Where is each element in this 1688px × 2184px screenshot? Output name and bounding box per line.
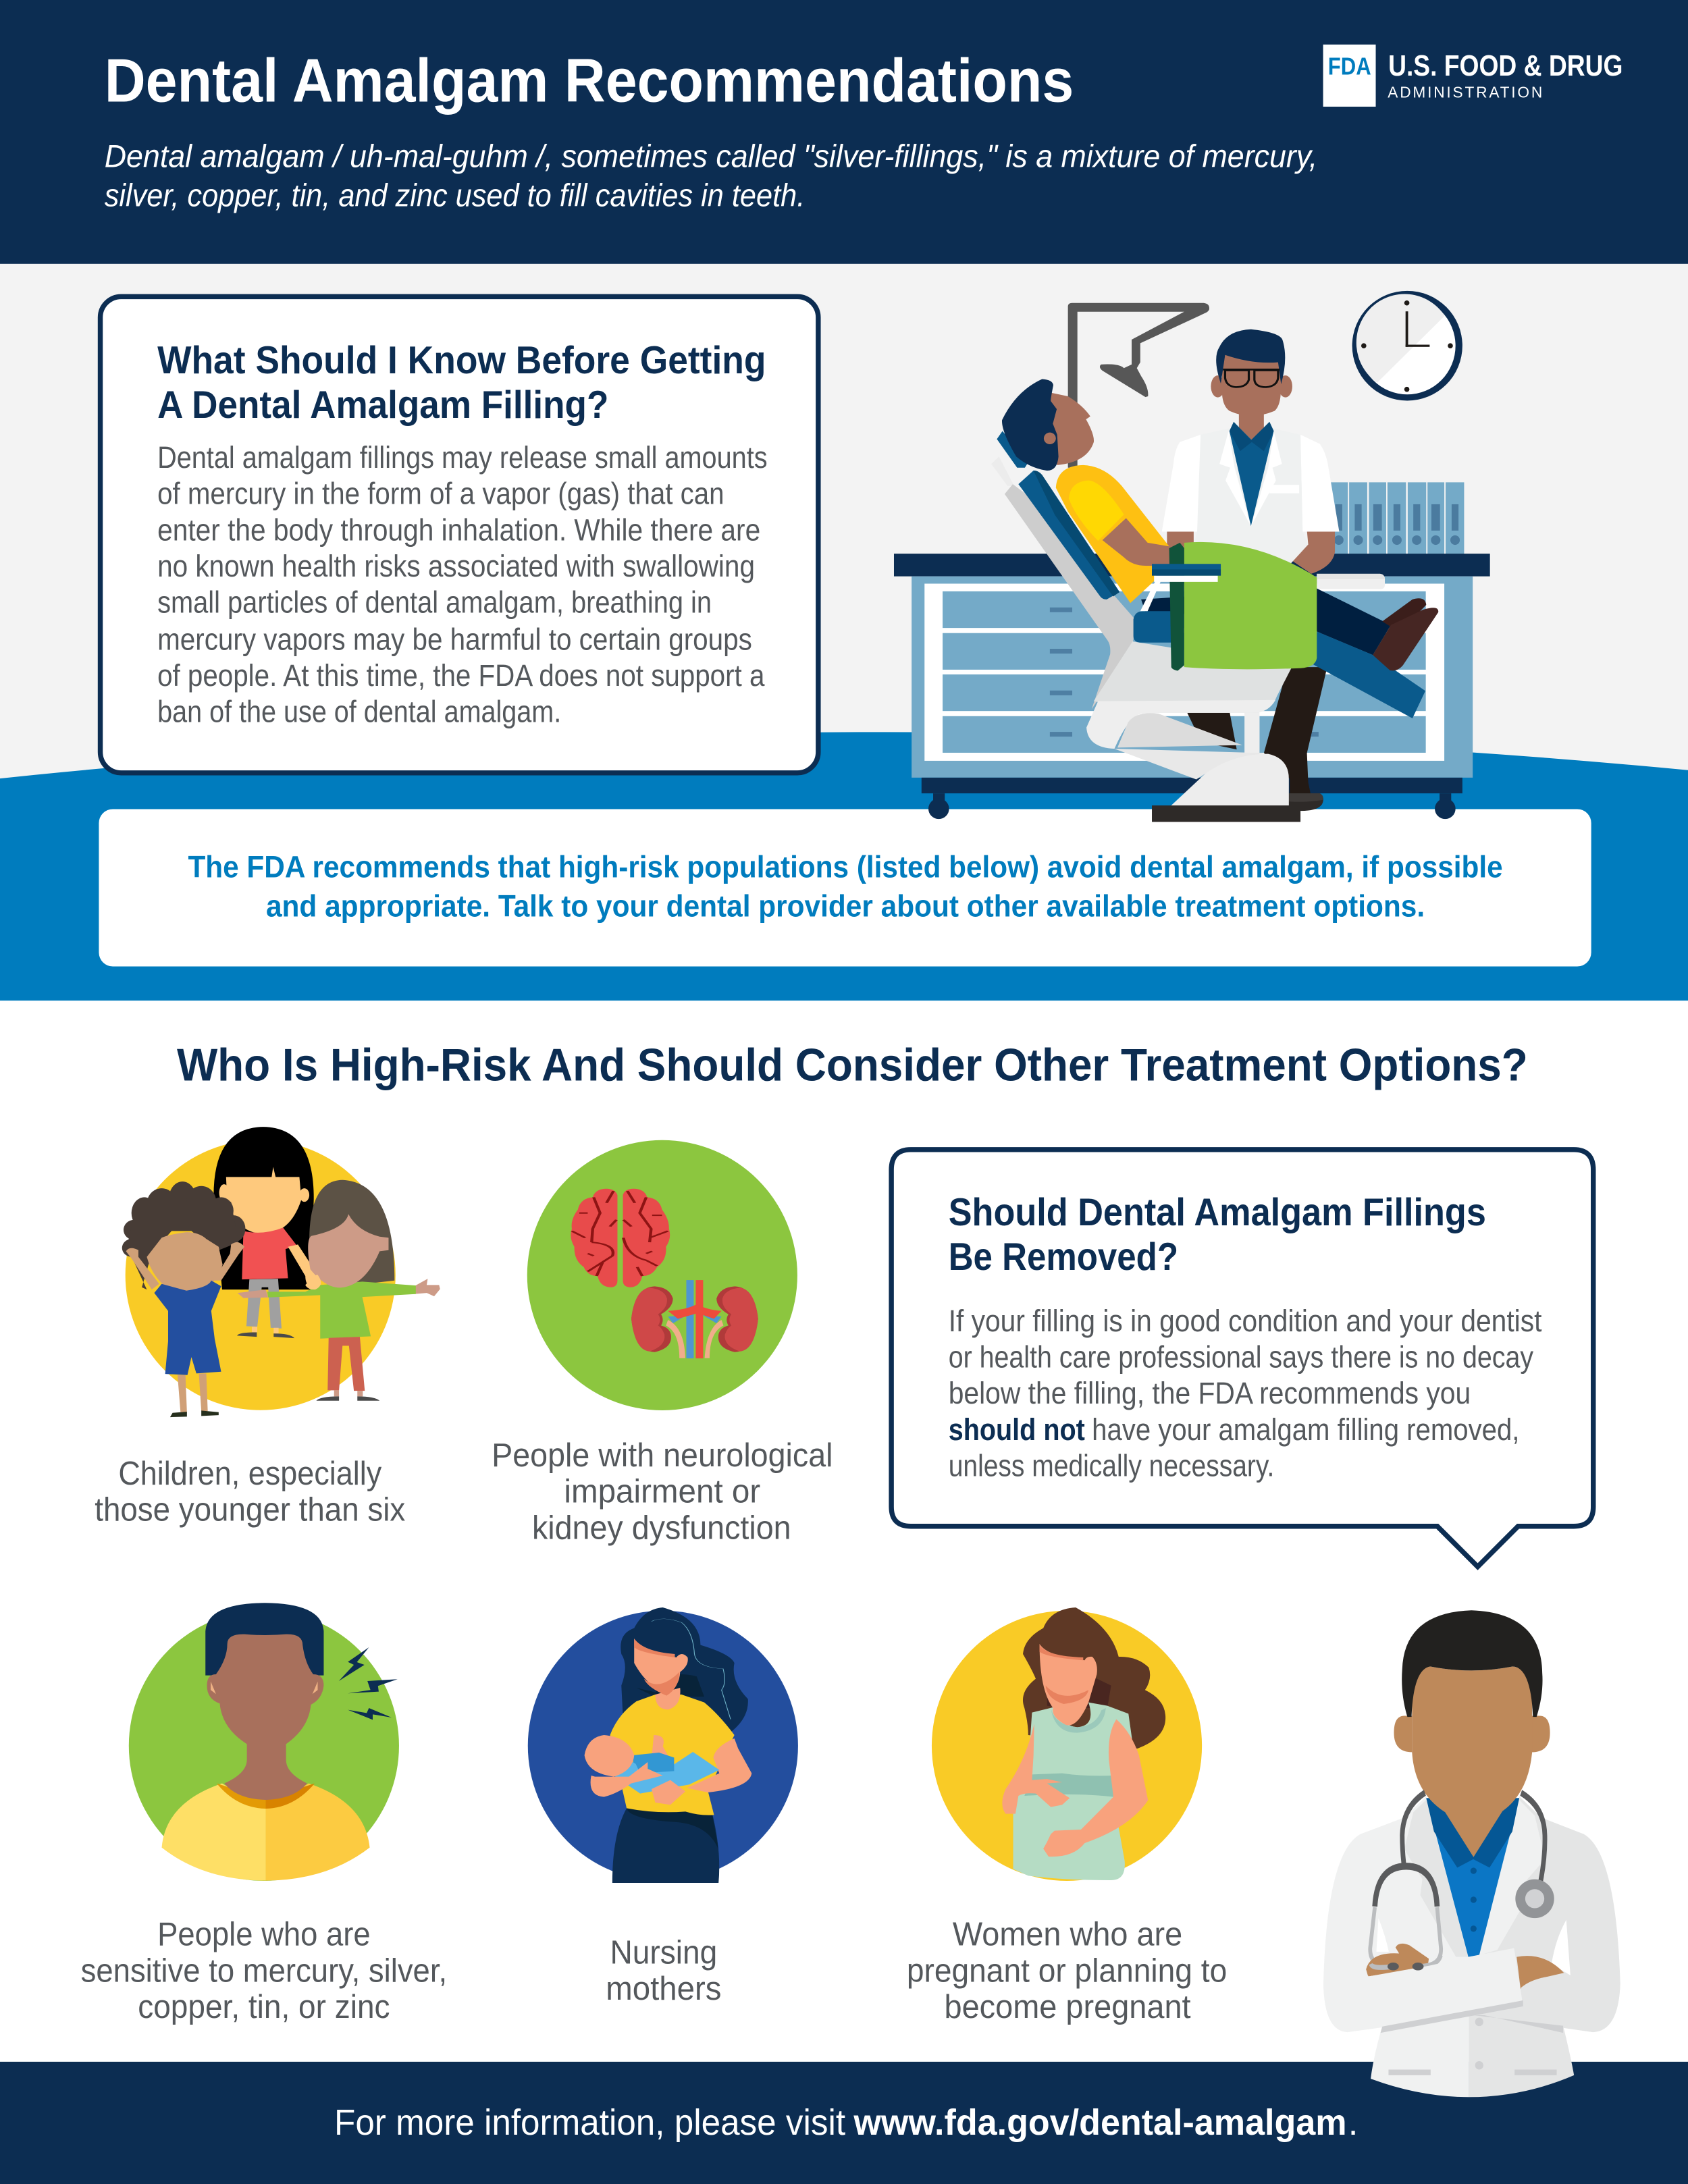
coat details bbox=[1388, 2018, 1557, 2075]
footer text: For more information, please visit bbox=[334, 2102, 845, 2143]
panel: what should I know bbox=[101, 296, 818, 773]
group: nursing mothers bbox=[528, 1607, 798, 2007]
subtitle bbox=[105, 139, 1317, 213]
footer text: . bbox=[1348, 2102, 1359, 2143]
label bbox=[492, 1437, 833, 1546]
panel body text: ban of the use of dental amalgam. bbox=[157, 695, 561, 729]
patient bbox=[1002, 379, 1438, 718]
section heading: Who Is High-Risk And Should Consider Other Treatment Options? bbox=[177, 1040, 1528, 1091]
label: kidney dysfunction bbox=[532, 1509, 791, 1546]
callout body text bbox=[949, 1304, 1542, 1483]
label bbox=[606, 1934, 721, 2007]
recommendation banner: The FDA recommends that high-risk populations (listed below) avoid dental amalgam, if possible bbox=[188, 850, 1503, 884]
group: pregnant women bbox=[907, 1607, 1227, 2025]
dental chair bbox=[991, 431, 1385, 822]
icon: brain and kidneys bbox=[527, 1140, 797, 1410]
callout body text: unless medically necessary. bbox=[949, 1449, 1274, 1483]
callout body text: below the filling, the FDA recommends you bbox=[949, 1376, 1471, 1410]
label: copper, tin, or zinc bbox=[138, 1988, 390, 2025]
brain bbox=[571, 1189, 670, 1287]
panel heading bbox=[157, 339, 766, 427]
FDA logo bbox=[1323, 45, 1623, 107]
recommendation banner bbox=[99, 809, 1591, 967]
arms bbox=[1376, 1918, 1571, 1975]
head bbox=[1394, 1716, 1550, 1752]
label: mothers bbox=[606, 1970, 721, 2007]
FDA logo: FDA bbox=[1328, 52, 1371, 80]
label bbox=[907, 1916, 1227, 2025]
panel heading: What Should I Know Before Getting bbox=[157, 339, 766, 382]
label: those younger than six bbox=[95, 1491, 405, 1528]
panel body text bbox=[157, 440, 768, 729]
recommendation banner: and appropriate. Talk to your dental provider about other available treatment options. bbox=[266, 888, 1425, 923]
binders bbox=[1331, 482, 1464, 554]
group: sensitive people bbox=[81, 1603, 447, 2025]
callout heading: Should Dental Amalgam Fillings bbox=[949, 1191, 1486, 1234]
callout heading bbox=[949, 1191, 1486, 1279]
subtitle: Dental amalgam / uh-mal-guhm /, sometimes called "silver-fillings," is a mixture of mercury, bbox=[105, 139, 1317, 175]
icon: children bbox=[122, 1127, 440, 1417]
group: neurological and kidney bbox=[492, 1140, 833, 1546]
panel body text: enter the body through inhalation. While there are bbox=[157, 512, 760, 547]
label: pregnant or planning to bbox=[907, 1952, 1227, 1989]
footer band bbox=[0, 2062, 1688, 2184]
panel body text: mercury vapors may be harmful to certain groups bbox=[157, 622, 752, 656]
panel heading: A Dental Amalgam Filling? bbox=[157, 383, 608, 427]
icon: nursing mother bbox=[528, 1607, 798, 1883]
callout body text: or health care professional says there is no decay bbox=[949, 1340, 1533, 1375]
panel body text: no known health risks associated with swallowing bbox=[157, 549, 755, 583]
label: sensitive to mercury, silver, bbox=[81, 1952, 447, 1989]
label: Nursing bbox=[610, 1934, 717, 1971]
label: People with neurological bbox=[492, 1437, 833, 1474]
label bbox=[81, 1916, 447, 2025]
FDA logo: ADMINISTRATION bbox=[1388, 83, 1542, 101]
header band bbox=[0, 0, 1688, 264]
footer text: www.fda.gov/dental-amalgam bbox=[853, 2102, 1347, 2143]
kidneys bbox=[631, 1286, 673, 1352]
panel body text: of mercury in the form of a vapor (gas) that can bbox=[157, 477, 724, 511]
dentist bbox=[1162, 329, 1339, 811]
icon: pregnant woman bbox=[932, 1607, 1202, 1881]
label: impairment or bbox=[564, 1473, 760, 1510]
label: People who are bbox=[157, 1916, 371, 1953]
label bbox=[95, 1455, 405, 1528]
label: Women who are bbox=[953, 1916, 1182, 1953]
shirt bbox=[1426, 1798, 1519, 1957]
subtitle: silver, copper, tin, and zinc used to fill cavities in teeth. bbox=[105, 178, 805, 213]
gray background section with blue floor bbox=[0, 264, 1688, 1001]
footer text bbox=[334, 2102, 1359, 2143]
panel body text: of people. At this time, the FDA does not support a bbox=[157, 658, 765, 693]
group: children bbox=[95, 1127, 440, 1528]
illustration: doctor with stethoscope bbox=[1323, 1610, 1620, 2097]
title: Dental Amalgam Recommendations bbox=[105, 47, 1074, 115]
coat bbox=[1323, 1796, 1469, 2097]
FDA logo: U.S. FOOD & DRUG bbox=[1388, 50, 1623, 82]
callout heading: Be Removed? bbox=[949, 1235, 1178, 1279]
label: become pregnant bbox=[945, 1988, 1191, 2025]
icon: man with sensitivity bbox=[129, 1603, 399, 1881]
wall clock bbox=[1352, 291, 1462, 400]
illustration: dentist and patient bbox=[894, 291, 1490, 822]
panel body text: Dental amalgam fillings may release small amounts bbox=[157, 440, 768, 475]
dental lamp bbox=[1068, 303, 1209, 468]
callout body text: should not bbox=[949, 1412, 1085, 1447]
counter and cabinet bbox=[894, 554, 1490, 819]
callout body text: If your filling is in good condition and your dentist bbox=[949, 1304, 1542, 1338]
callout: should fillings be removed bbox=[891, 1150, 1593, 1567]
callout body text: have your amalgam filling removed, bbox=[1092, 1412, 1519, 1447]
panel body text: small particles of dental amalgam, breathing in bbox=[157, 585, 712, 620]
stethoscope bbox=[1370, 1793, 1545, 1967]
label: Children, especially bbox=[118, 1455, 381, 1492]
